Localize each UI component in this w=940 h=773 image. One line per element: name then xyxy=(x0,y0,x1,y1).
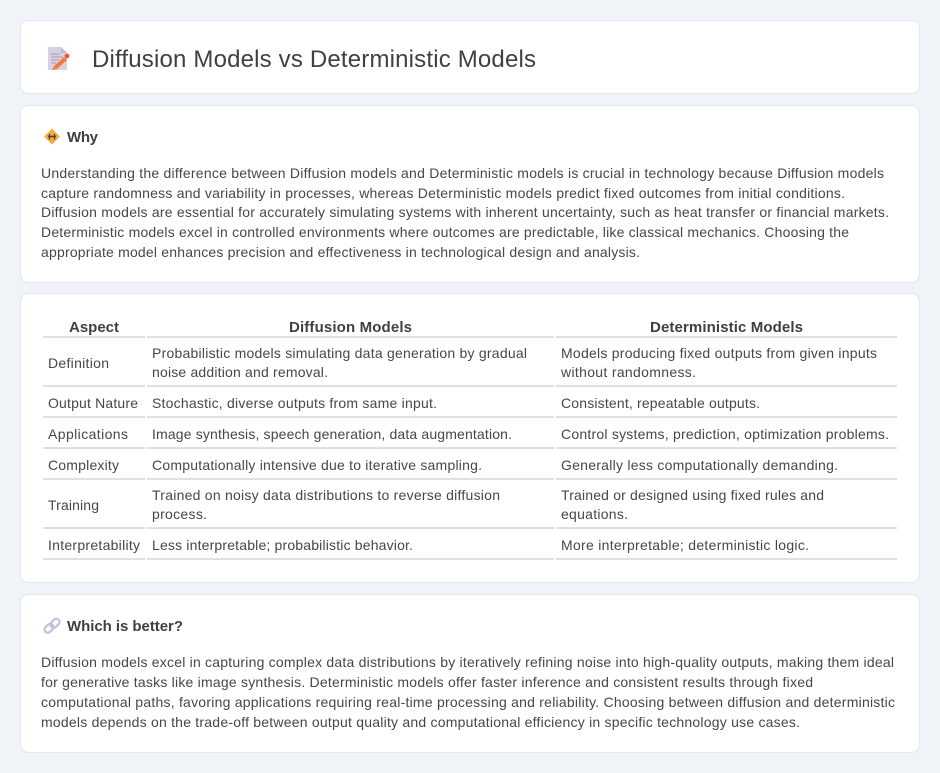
row: complexity xyxy=(48,457,838,473)
row: definition: Probabilistic models simulating data generation by gradual xyxy=(152,345,527,361)
table header row: Aspect xyxy=(69,319,119,336)
heading: which is better: Which is better? xyxy=(67,618,183,635)
row: interpretability: Interpretability xyxy=(48,537,140,553)
icon: warning diamond xyxy=(44,128,60,144)
row: training: Trained on noisy data distributions to reverse diffusion xyxy=(152,487,500,503)
row: output nature xyxy=(48,395,760,411)
row: interpretability: Less interpretable; probabilistic behavior. xyxy=(152,537,413,553)
row: output nature: Output Nature xyxy=(48,395,138,411)
heading: why: Why xyxy=(67,129,99,146)
text block: which is better paragraph: models depends on the trade-off between output quality and computational efficiency in specific technology use cases. xyxy=(41,714,800,730)
row: output nature: Consistent, repeatable outputs. xyxy=(561,395,760,411)
panel: why xyxy=(20,106,920,282)
row: training: Training xyxy=(48,497,99,513)
row: training: process. xyxy=(152,506,207,522)
row: applications: Control systems, prediction, optimization problems. xyxy=(561,426,889,442)
icon: chain link xyxy=(43,617,61,634)
row: definition xyxy=(48,345,877,380)
text block: which is better paragraph: for generative tasks like image synthesis. Deterministic models offer faster inference and consistent results through fixed xyxy=(41,674,813,690)
row: training: Trained or designed using fixed rules and xyxy=(561,487,824,503)
row: interpretability: More interpretable; deterministic logic. xyxy=(561,537,809,553)
text block: why paragraph: Understanding the difference between Diffusion models and Deterministic models is crucial in technology because Diffusion models xyxy=(41,165,884,181)
text block: which is better paragraph: computational paths, favoring applications requiring real-time processing and reliability. Choosing between diffusion and deterministic xyxy=(41,694,895,710)
row: complexity: Complexity xyxy=(48,457,119,473)
text block: why paragraph: appropriate model enhances precision and effectiveness in technological design and analysis. xyxy=(41,244,640,260)
table header row: Diffusion Models xyxy=(289,319,412,336)
text block: why paragraph: Diffusion models are essential for accurately simulating systems with inherent uncertainty, such as heat transfer or financial markets. xyxy=(41,204,889,220)
icon: document with pencil xyxy=(48,47,69,70)
text block: which is better paragraph: Diffusion models excel in capturing complex data distributions by iteratively refining noise into high-quality outputs, making them ideal xyxy=(41,654,894,670)
row: applications: Applications xyxy=(48,426,128,442)
row: definition: Definition xyxy=(48,355,109,371)
row: complexity: Computationally intensive due to iterative sampling. xyxy=(152,457,482,473)
row: definition: noise addition and removal. xyxy=(152,364,328,380)
panel: header xyxy=(20,20,920,94)
row: applications xyxy=(48,426,889,442)
table header row: Deterministic Models xyxy=(650,319,803,336)
text block: why paragraph xyxy=(41,165,889,260)
panel: which is better xyxy=(20,594,920,752)
row: definition: Models producing fixed outputs from given inputs xyxy=(561,345,877,361)
row: interpretability xyxy=(48,537,809,553)
text block: which is better paragraph xyxy=(41,654,895,730)
row: applications: Image synthesis, speech generation, data augmentation. xyxy=(152,426,512,442)
table header row xyxy=(69,319,803,336)
text block: why paragraph: Deterministic models excel in controlled environments where outcomes are predictable, like classical mechanics. Choosing the xyxy=(41,224,849,240)
panel: comparison table xyxy=(20,294,920,582)
row: training xyxy=(48,487,824,522)
row: training: equations. xyxy=(561,506,628,522)
row: output nature: Stochastic, diverse outputs from same input. xyxy=(152,395,437,411)
row: definition: without randomness. xyxy=(560,364,696,380)
text block: why paragraph: capture randomness and variability in processes, whereas Deterministic models predict fixed outcomes from initial conditions. xyxy=(41,185,845,201)
row: complexity: Generally less computationally demanding. xyxy=(561,457,838,473)
title: Diffusion Models vs Deterministic Models xyxy=(92,46,536,73)
